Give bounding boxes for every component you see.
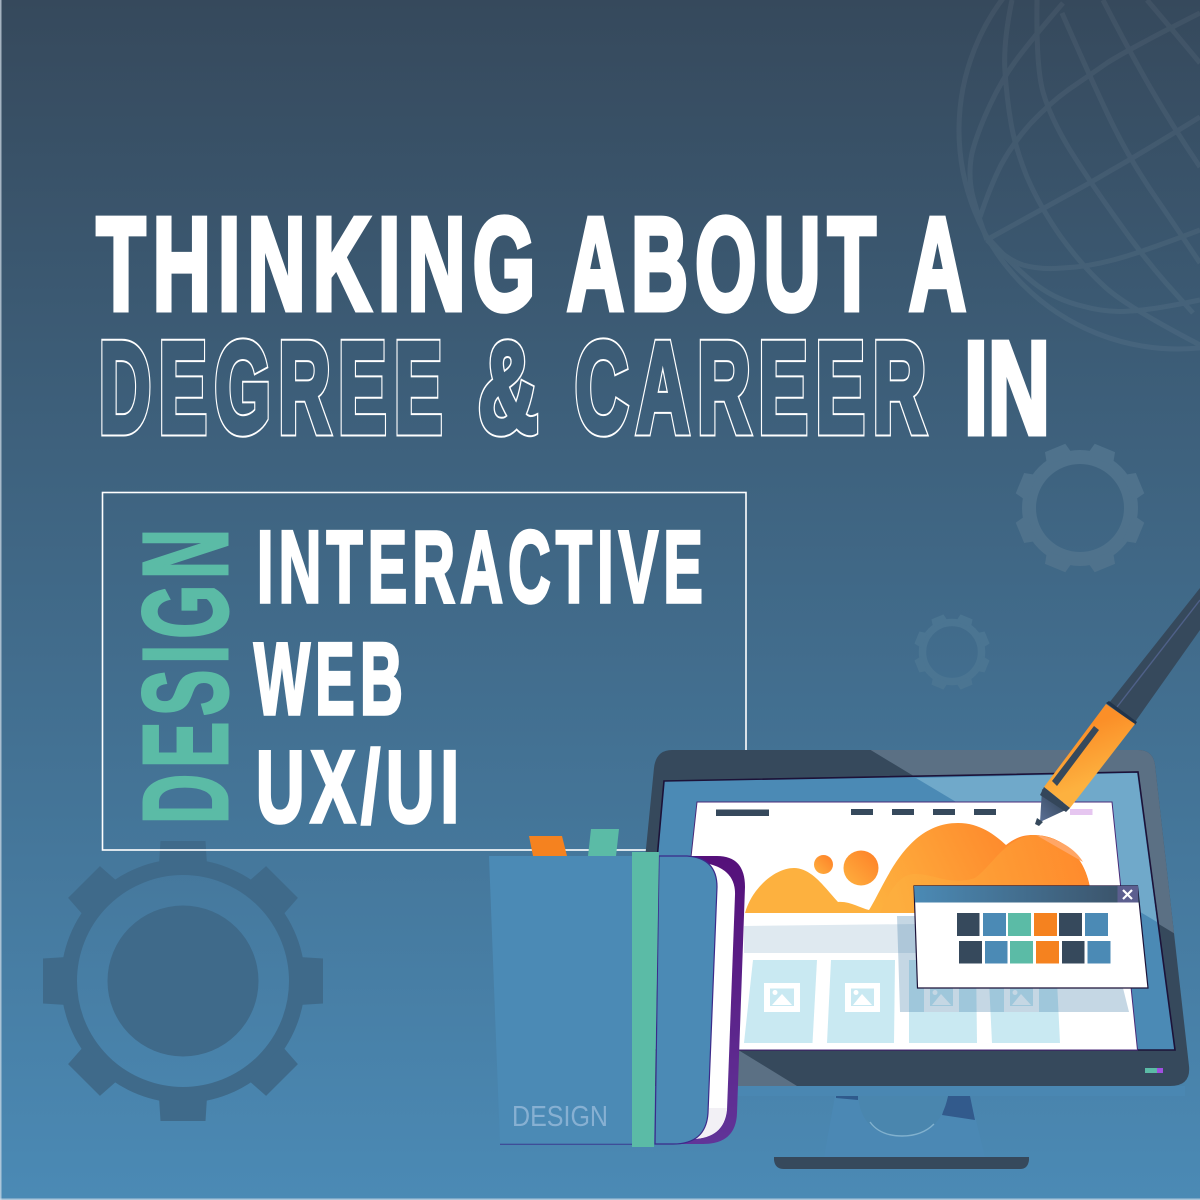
title line 2: outlined words and IN: IN bbox=[964, 314, 1050, 462]
elastic strap bbox=[632, 852, 659, 1147]
title line 1: ABOUT bbox=[567, 190, 883, 338]
image cards bbox=[744, 960, 1060, 1043]
hills illustration bbox=[745, 823, 1092, 913]
monitor bbox=[620, 745, 1200, 1090]
list: disciplines bbox=[254, 510, 708, 844]
icon: stylus pen bbox=[1035, 588, 1200, 826]
power LED bbox=[1145, 1068, 1163, 1073]
icon: small gear bbox=[914, 614, 990, 690]
monitor bezel bbox=[620, 745, 1200, 1090]
title line 2: outlined words and IN: DEGREE bbox=[99, 316, 450, 460]
close button bbox=[1118, 886, 1138, 902]
list: disciplines: WEB bbox=[254, 622, 408, 736]
panel: design disciplines box bbox=[102, 492, 746, 850]
list: disciplines: UX/UI bbox=[256, 730, 465, 844]
title line 2: outlined words and IN bbox=[99, 314, 1050, 462]
icon: large gear bbox=[43, 841, 323, 1121]
book front cover bbox=[489, 856, 632, 1144]
title line 2: outlined words and IN: & bbox=[478, 316, 538, 460]
vertical label: DESIGN: DESIGN bbox=[117, 523, 253, 824]
icon: medium gear bbox=[1015, 443, 1145, 573]
monitor stand bbox=[640, 1086, 1185, 1169]
notebook bbox=[489, 829, 745, 1147]
palette swatches bbox=[957, 913, 1110, 964]
color palette popup bbox=[914, 886, 1148, 988]
popup shadow bbox=[897, 916, 1129, 1012]
title line 1: A bbox=[909, 190, 966, 338]
image placeholder icons bbox=[764, 983, 1039, 1012]
bookmark tabs bbox=[529, 829, 619, 856]
book pages and back cover bbox=[670, 856, 745, 1144]
monitor screen bbox=[640, 772, 1175, 1050]
page navigation bbox=[716, 809, 1092, 816]
list: disciplines: INTERACTIVE bbox=[257, 510, 708, 624]
title line 1: THINKING bbox=[96, 190, 542, 338]
title line 2: outlined words and IN: CAREER bbox=[575, 316, 934, 460]
book spine flap bbox=[655, 856, 717, 1144]
web page bbox=[670, 802, 1138, 1050]
content band bbox=[744, 924, 916, 953]
title line 2: outlined words and IN: CAREER bbox=[575, 316, 934, 460]
title line 2: outlined words and IN: & bbox=[478, 316, 538, 460]
icon: globe bbox=[959, 0, 1200, 349]
book cover label: DESIGN bbox=[512, 1101, 608, 1133]
title line 2: outlined words and IN: DEGREE bbox=[99, 316, 450, 460]
